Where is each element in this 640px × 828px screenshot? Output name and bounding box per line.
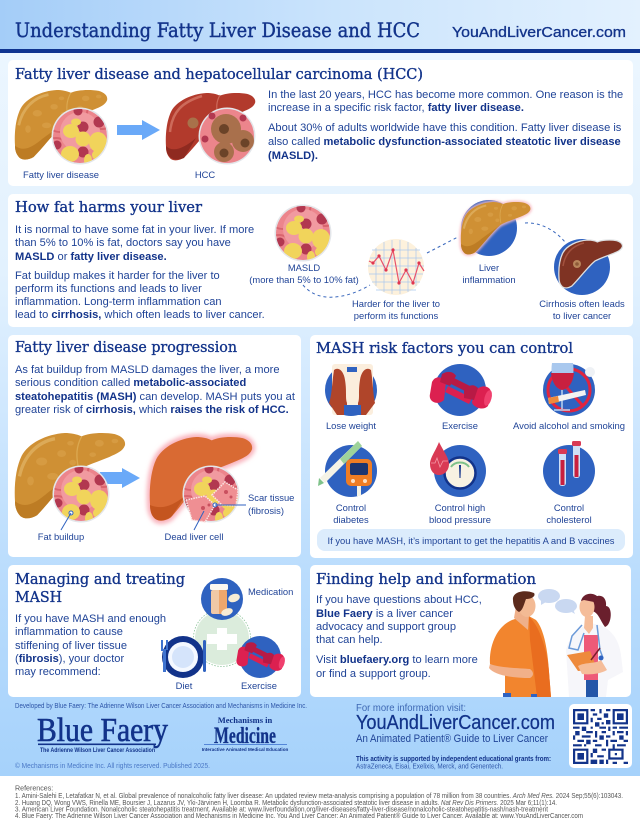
explanatory text bbox=[15, 224, 265, 321]
intro text: About 30% of adults worldwide have this condition. Fatty liver disease is bbox=[268, 122, 622, 134]
caption: Control bbox=[554, 502, 584, 513]
prompt: For more information visit: bbox=[356, 703, 466, 714]
icon: cirrhosis liver bbox=[554, 239, 622, 295]
caption: more than 5% to 10% fat: (more than 5% to 10% fat) bbox=[249, 274, 359, 285]
illustration: doctor bbox=[566, 594, 623, 697]
caption: cirrhosis: Cirrhosis often leads bbox=[539, 298, 625, 309]
HCC liver illustration bbox=[166, 93, 256, 164]
icon: MASLD cell bbox=[265, 196, 340, 263]
label: exercise: Exercise bbox=[241, 680, 277, 691]
heading: How fat harms your liver bbox=[15, 198, 203, 216]
caption: diabetes bbox=[333, 514, 369, 525]
logo: Mechanisms in Medicine: Interactive Animated Medical Education bbox=[202, 747, 289, 752]
explanatory text: It is normal to have some fat in your liver. If more bbox=[15, 224, 254, 236]
references: 1. Amini-Salehi E, Letafatkar N, et al. Global prevalence of nonalcoholic fatty liver disease: An updated review meta-analysis comprising a population of 78 million from 38 countries. Arch Med Res. 2024 Sep;55(6):103043. bbox=[15, 792, 623, 800]
fatty liver illustration bbox=[13, 90, 117, 166]
label: diet: Diet bbox=[176, 680, 193, 691]
copyright: © Mechanisms in Medicine Inc. All rights reserved. Published 2025. bbox=[15, 762, 210, 770]
icon: lose weight bbox=[325, 364, 377, 416]
caption: to liver cancer: to liver cancer bbox=[553, 310, 611, 321]
panel: managing and treating MASH bbox=[8, 565, 301, 697]
icon: control cholesterol bbox=[543, 441, 595, 497]
label: dead liver cell: Dead liver cell bbox=[165, 531, 223, 542]
panel: MASH risk factors bbox=[310, 335, 633, 558]
caption: perform functions: perform its functions bbox=[354, 310, 439, 321]
icon: avoid alcohol and smoking bbox=[543, 363, 595, 416]
explanatory text: lead to cirrhosis, which often leads to liver cancer. bbox=[15, 309, 265, 321]
references: 3. American Liver Foundation. Nonalcoholic steatohepatitis treatment. Available at: www.liverfoundation.org/liver-diseases/fatty-liver-disease/nonalcoholic-steatohepatitis-nash/nash-treatment bbox=[15, 806, 548, 814]
text: steatohepatitis (MASH) can develop. MASH puts you at bbox=[15, 391, 295, 403]
explanatory text: than 5% to 10% is fat, doctors say you have bbox=[15, 237, 231, 249]
caption: Avoid alcohol and smoking bbox=[513, 420, 625, 431]
subtitle: An Animated Patient® Guide to Liver Cancer bbox=[356, 733, 548, 745]
caption: fatty liver disease: Fatty liver disease bbox=[23, 169, 99, 180]
heading: Fatty liver disease progression bbox=[15, 338, 237, 356]
heading: MASH bbox=[15, 588, 62, 606]
icon: function chart bbox=[368, 239, 424, 295]
inflamed liver with scar tissue bbox=[150, 437, 252, 530]
explanatory text: Fat buildup makes it harder for the liver to bbox=[15, 270, 220, 282]
heading bbox=[15, 570, 185, 606]
icon: exercise bbox=[236, 636, 286, 678]
text bbox=[15, 613, 166, 678]
caption: blood pressure bbox=[429, 514, 491, 525]
label: fat buildup: Fat buildup bbox=[38, 531, 84, 542]
sponsors: AstraZeneca, Eisai, Exelixis, Merck, and Genentech. bbox=[356, 762, 503, 770]
illustration: speech bubbles bbox=[538, 589, 577, 614]
heading: Managing and treating bbox=[15, 570, 185, 588]
header banner bbox=[0, 0, 640, 53]
text: or find a support group. bbox=[316, 668, 431, 680]
heading: Fatty liver disease and hepatocellular carcinoma (HCC) bbox=[15, 65, 423, 83]
footer: website promotion bbox=[356, 703, 632, 770]
text: serious condition called metabolic-associated bbox=[15, 377, 246, 389]
treatment circle bbox=[194, 610, 250, 666]
text: Visit bluefaery.org to learn more bbox=[316, 654, 478, 666]
label: scar tissue: Scar tissue bbox=[248, 492, 294, 503]
text: If you have questions about HCC, bbox=[316, 594, 482, 606]
intro text: increase in a specific risk factor, fatty liver disease. bbox=[268, 102, 524, 114]
grant statement: This activity is supported by independent educational grants from: bbox=[356, 754, 551, 763]
footer: developer credits bbox=[15, 703, 307, 770]
arrow bbox=[117, 120, 160, 140]
intro text: (MASLD). bbox=[268, 150, 318, 162]
fatty liver with fat buildup bbox=[13, 433, 125, 530]
references bbox=[0, 776, 640, 828]
title: Understanding Fatty Liver Disease and HCC bbox=[15, 19, 420, 42]
text: may recommend: bbox=[15, 666, 101, 678]
logo: Blue Faery: The Adrienne Wilson Liver Cancer Association bbox=[40, 747, 155, 754]
panel: fatty liver disease and HCC bbox=[8, 60, 633, 186]
panel: finding help and information bbox=[310, 565, 631, 697]
caption: cholesterol bbox=[546, 514, 592, 525]
icon: inflamed liver bbox=[460, 200, 530, 257]
label: fibrosis: (fibrosis) bbox=[248, 505, 284, 516]
references: References: bbox=[15, 784, 53, 792]
caption: HCC: HCC bbox=[195, 169, 215, 180]
icon: control diabetes bbox=[318, 441, 377, 497]
label: medication: Medication bbox=[248, 586, 293, 597]
text: that can help. bbox=[316, 634, 383, 646]
references: 2. Huang DQ, Wong VWS, Rinella ME, Boursier J, Lazarus JV, Yki-Järvinen H, Loomba R. Metabolic dysfunction-associated steatotic liver disease in adults. Nat Rev Dis Primers. 2025 Mar 6;11(1):14. bbox=[15, 799, 557, 807]
explanatory text: MASLD or fatty liver disease. bbox=[15, 251, 167, 263]
website url: YouAndLiverCancer.com bbox=[452, 25, 626, 41]
heading: MASH risk factors you can control bbox=[316, 339, 573, 357]
text bbox=[316, 594, 482, 680]
text: stiffening of liver tissue bbox=[15, 640, 127, 652]
callout: vaccines bbox=[317, 529, 625, 551]
text: As fat buildup from MASLD damages the liver, a more bbox=[15, 364, 280, 376]
text: (fibrosis), your doctor bbox=[15, 653, 124, 665]
logo: Blue Faery: Blue Faery bbox=[37, 712, 168, 749]
text: If you have MASH and enough bbox=[15, 613, 166, 625]
text bbox=[15, 364, 295, 416]
text: greater risk of cirrhosis, which raises the risk of HCC. bbox=[15, 404, 289, 416]
intro text: also called metabolic dysfunction-associated steatotic liver disease bbox=[268, 136, 621, 148]
panel: how fat harms your liver bbox=[8, 194, 633, 327]
caption: Lose weight bbox=[326, 420, 376, 431]
caption: Control high bbox=[435, 502, 485, 513]
caption: Exercise bbox=[442, 420, 478, 431]
logo: Mechanisms in Medicine: Medicine bbox=[214, 723, 276, 748]
text: Blue Faery is a liver cancer bbox=[316, 608, 453, 620]
text: inflammation to cause bbox=[15, 626, 123, 638]
developed by note: Developed by Blue Faery: The Adrienne Wilson Liver Cancer Association and Mechanisms in Medicine Inc. bbox=[15, 703, 307, 710]
website: YouAndLiverCancer.com bbox=[356, 712, 555, 734]
icon: control high blood pressure bbox=[430, 442, 486, 497]
explanatory text: perform its functions and leads to liver bbox=[15, 283, 202, 295]
panel: fatty liver disease progression bbox=[8, 335, 301, 557]
intro text: In the last 20 years, HCC has become more common. One reason is the bbox=[268, 89, 623, 101]
dashed connectors bbox=[303, 223, 565, 297]
heading: Finding help and information bbox=[316, 570, 536, 588]
caption: harder for the liver: Harder for the liver to bbox=[352, 298, 440, 309]
caption: MASLD: MASLD bbox=[288, 262, 320, 273]
caption: Control bbox=[336, 502, 366, 513]
text: advocacy and support group bbox=[316, 621, 456, 633]
icon: medication bbox=[201, 578, 243, 620]
logo: Mechanisms in Medicine bbox=[202, 715, 289, 752]
callout: vaccines: If you have MASH, it’s important to get the hepatitis A and B vaccines bbox=[328, 535, 615, 546]
logo: Mechanisms in Medicine: Mechanisms in bbox=[218, 715, 273, 725]
explanatory text: inflammation. Long-term inflammation can bbox=[15, 296, 222, 308]
QR code bbox=[569, 704, 632, 768]
caption: liver: Liver bbox=[479, 262, 499, 273]
arrow bbox=[100, 468, 140, 488]
icon: exercise bbox=[430, 364, 493, 416]
intro text bbox=[268, 89, 623, 162]
caption: inflammation: inflammation bbox=[462, 274, 516, 285]
icon: diet bbox=[162, 636, 206, 678]
illustration: patient bbox=[489, 591, 551, 697]
